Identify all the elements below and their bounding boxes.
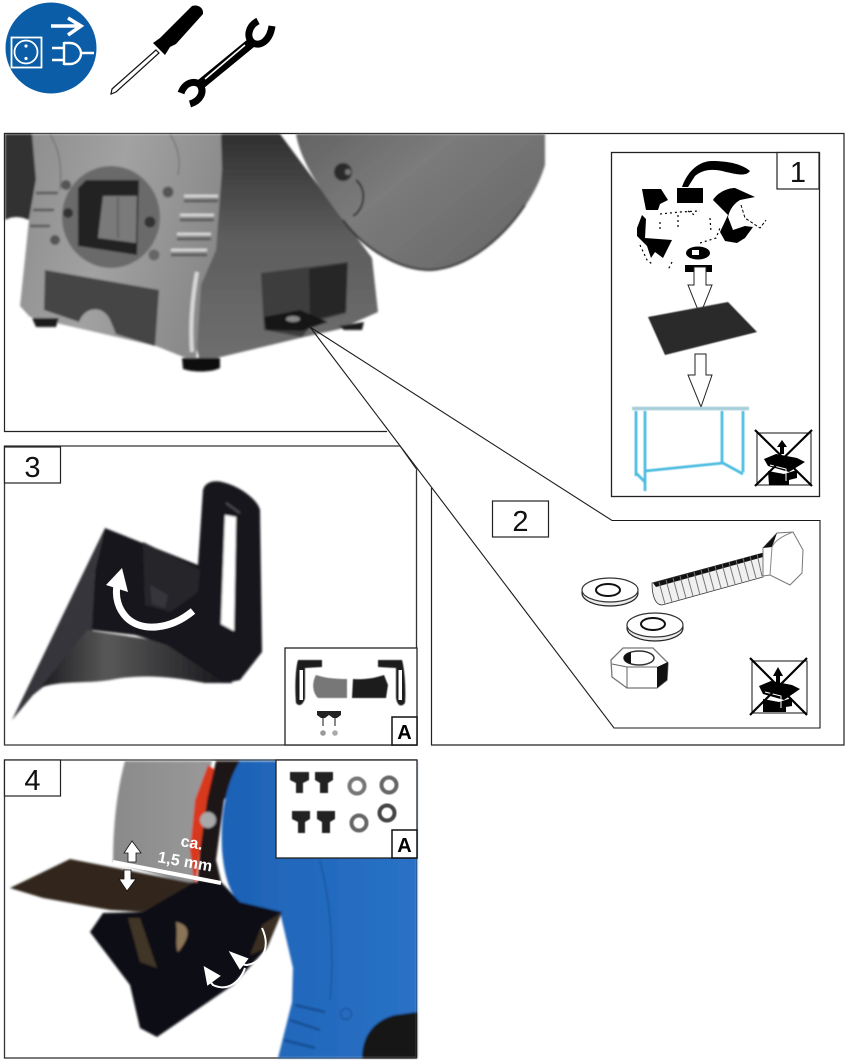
arrow: grinder onto mat — [688, 267, 712, 315]
washer — [627, 613, 683, 641]
label 4: 4 — [24, 765, 41, 797]
washer — [582, 578, 638, 606]
arrows: tighten — [205, 928, 266, 987]
panel 4: adjusting the tool rest — [4, 760, 417, 1058]
label 1 — [777, 152, 819, 189]
workbench — [632, 408, 749, 491]
icon: open-end wrench — [181, 21, 272, 104]
inset A: screws and washers — [276, 760, 417, 858]
label A: A — [397, 722, 412, 744]
photo: grinder base with switch — [5, 134, 545, 372]
label 3 — [4, 447, 60, 484]
icon: screwdriver — [111, 5, 203, 94]
high-contrast grinder image — [637, 161, 766, 272]
label 4 — [4, 760, 60, 797]
icon: disconnect mains plug (mandatory sign) — [6, 2, 96, 94]
panel 2: bolt and washers — [492, 501, 807, 715]
label 2 — [492, 501, 548, 538]
rubber mat — [648, 302, 757, 355]
arrows: gap double arrow — [119, 841, 141, 891]
label A: A — [397, 835, 412, 857]
arrow: mat onto table — [688, 354, 712, 407]
arrow: rotate knob — [106, 568, 193, 627]
photo: grinding wheel and tool rest — [10, 761, 417, 1058]
label 2: 2 — [512, 506, 529, 538]
icon: do not stack on box — [750, 658, 807, 715]
label 1: 1 — [790, 157, 806, 189]
inset A: parts — [285, 648, 417, 745]
icon: do not stack on box — [755, 430, 812, 486]
panel 1: mounting on workbench — [612, 152, 820, 496]
panel 3: spark guard bracket — [4, 446, 417, 745]
measurement line — [113, 862, 221, 883]
leader lines to panel 2 — [310, 327, 820, 728]
bolt — [652, 532, 803, 605]
photo: bracket — [12, 481, 262, 720]
label 3: 3 — [24, 452, 41, 484]
nut — [611, 648, 668, 688]
label: ca. 1,5 mm: 1,5 mm — [156, 849, 214, 876]
label: ca. 1,5 mm — [156, 833, 214, 876]
label A — [392, 830, 417, 858]
label: ca. 1,5 mm: ca. — [179, 833, 204, 854]
panel: grinder base photo frame — [4, 134, 844, 745]
